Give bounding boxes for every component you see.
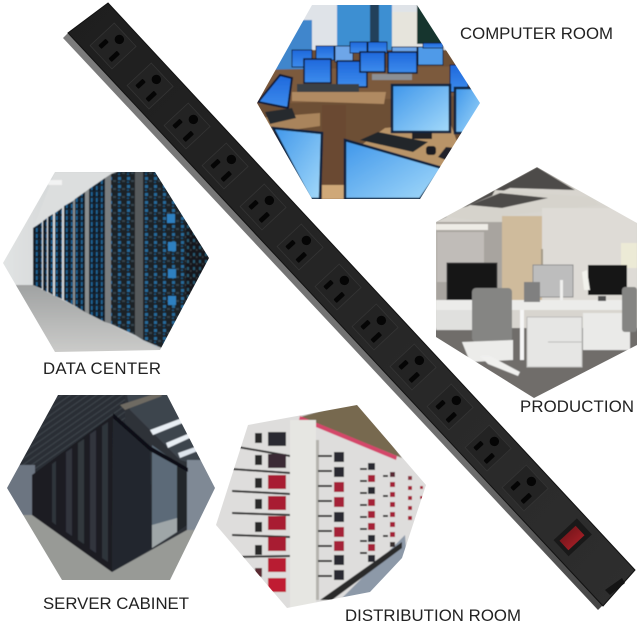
outlet 6 <box>277 224 323 270</box>
photo: office production hexagon <box>430 160 640 400</box>
outlet 4 <box>202 143 248 189</box>
outlet 11 <box>465 425 511 471</box>
outlet 10 <box>427 384 473 430</box>
rocker switch <box>554 518 592 556</box>
outlet 1 <box>90 23 136 69</box>
label: data center: DATA CENTER <box>43 359 161 378</box>
outlet 3 <box>164 103 210 149</box>
outlet 2 <box>127 63 173 109</box>
label: server cabinet: SERVER CABINET <box>43 594 189 613</box>
label: computer room: COMPUTER ROOM <box>460 24 613 43</box>
outlet 7 <box>315 264 361 310</box>
outlet 12 <box>502 465 548 511</box>
outlet 8 <box>352 304 398 350</box>
photo: distribution room switchgear hexagon <box>216 405 426 608</box>
label: production: PRODUCTION <box>520 397 634 416</box>
photo: server cabinet hexagon <box>7 395 215 580</box>
strip side edge <box>63 33 603 610</box>
photo: data center hexagon <box>3 172 209 352</box>
outlet 5 <box>240 184 286 230</box>
outlet 9 <box>390 344 436 390</box>
strip end connector <box>605 578 625 595</box>
photo: computer room hexagon <box>257 5 480 199</box>
